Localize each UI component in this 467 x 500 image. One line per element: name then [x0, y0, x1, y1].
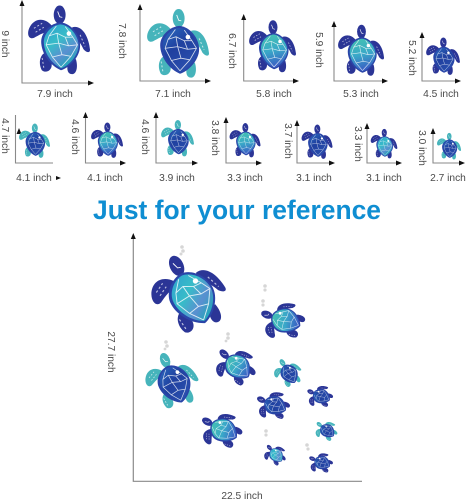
size diagram: 4.6 by 4.1 inch turtle: 4.6 inch — [69, 119, 80, 155]
size diagram: 7.8 by 7.1 inch turtle: 7.1 inch — [155, 89, 191, 100]
size diagram: 9 by 7.9 inch turtle — [0, 0, 94, 100]
turtle F — [269, 353, 306, 391]
turtle K — [305, 448, 336, 477]
size diagram: 3.8 by 3.3 inch turtle — [209, 117, 263, 184]
size diagram: 6.7 by 5.8 inch turtle — [226, 14, 299, 100]
size diagram: 7.8 by 7.1 inch turtle — [116, 4, 211, 100]
size diagram: 3.7 by 3.1 inch turtle — [282, 120, 335, 184]
size diagram: 3.7 by 3.1 inch turtle: 3.7 inch — [282, 123, 293, 159]
size diagram: 3.3 by 3.1 inch turtle: 3.3 inch — [352, 126, 363, 162]
turtle I — [310, 415, 341, 445]
size diagram: 4.7 by 4.1 inch turtle: 4.1 inch — [16, 173, 52, 184]
size diagram: 4.6 by 3.9 inch turtle: 3.9 inch — [159, 173, 195, 184]
height label: 27.7 inch — [105, 331, 116, 373]
size diagram: 4.6 by 4.1 inch turtle — [69, 112, 126, 184]
size diagram: 5.9 by 5.3 inch turtle: 5.3 inch — [343, 89, 379, 100]
size diagram: 3.0 by 2.7 inch turtle: 2.7 inch — [430, 173, 466, 184]
size diagram: 3.3 by 3.1 inch turtle — [352, 123, 402, 184]
size diagram: 5.9 by 5.3 inch turtle — [313, 21, 388, 100]
size diagram: 3.8 by 3.3 inch turtle: 3.3 inch — [227, 173, 263, 184]
size diagram: 3.8 by 3.3 inch turtle: 3.8 inch — [209, 120, 220, 156]
size diagram: 6.7 by 5.8 inch turtle: 5.8 inch — [256, 89, 292, 100]
chart axes — [131, 233, 362, 481]
size diagram: 6.7 by 5.8 inch turtle: 6.7 inch — [226, 33, 237, 69]
turtle G — [251, 384, 294, 426]
size diagram: 4.6 by 4.1 inch turtle: 4.1 inch — [87, 173, 123, 184]
bubbles — [164, 245, 310, 451]
reference layout chart — [105, 233, 362, 500]
size diagram: 3.0 by 2.7 inch turtle — [416, 128, 466, 184]
size diagram: 3.0 by 2.7 inch turtle: 3.0 inch — [416, 130, 427, 166]
turtle J — [259, 439, 290, 469]
size diagram: 4.7 by 4.1 inch turtle — [0, 115, 61, 184]
turtle E — [254, 295, 309, 346]
title: Just for your reference — [93, 195, 381, 225]
turtle H — [302, 380, 336, 412]
turtle B — [138, 345, 205, 415]
size diagram: 4.6 by 3.9 inch turtle — [139, 112, 198, 184]
size diagram: 4.6 by 3.9 inch turtle: 4.6 inch — [139, 119, 150, 155]
turtle C — [207, 337, 263, 393]
size diagram: 7.8 by 7.1 inch turtle: 7.8 inch — [116, 23, 127, 59]
size diagram: 5.9 by 5.3 inch turtle: 5.9 inch — [313, 32, 324, 68]
size diagram: 5.2 by 4.5 inch turtle — [406, 32, 461, 100]
turtle A — [139, 241, 237, 343]
turtle D — [193, 403, 248, 456]
size diagram: 9 by 7.9 inch turtle: 7.9 inch — [37, 89, 73, 100]
size diagram: 5.2 by 4.5 inch turtle: 5.2 inch — [406, 40, 417, 76]
size diagram: 3.7 by 3.1 inch turtle: 3.1 inch — [296, 173, 332, 184]
size diagram: 5.2 by 4.5 inch turtle: 4.5 inch — [423, 89, 459, 100]
size diagram: 3.3 by 3.1 inch turtle: 3.1 inch — [366, 173, 402, 184]
